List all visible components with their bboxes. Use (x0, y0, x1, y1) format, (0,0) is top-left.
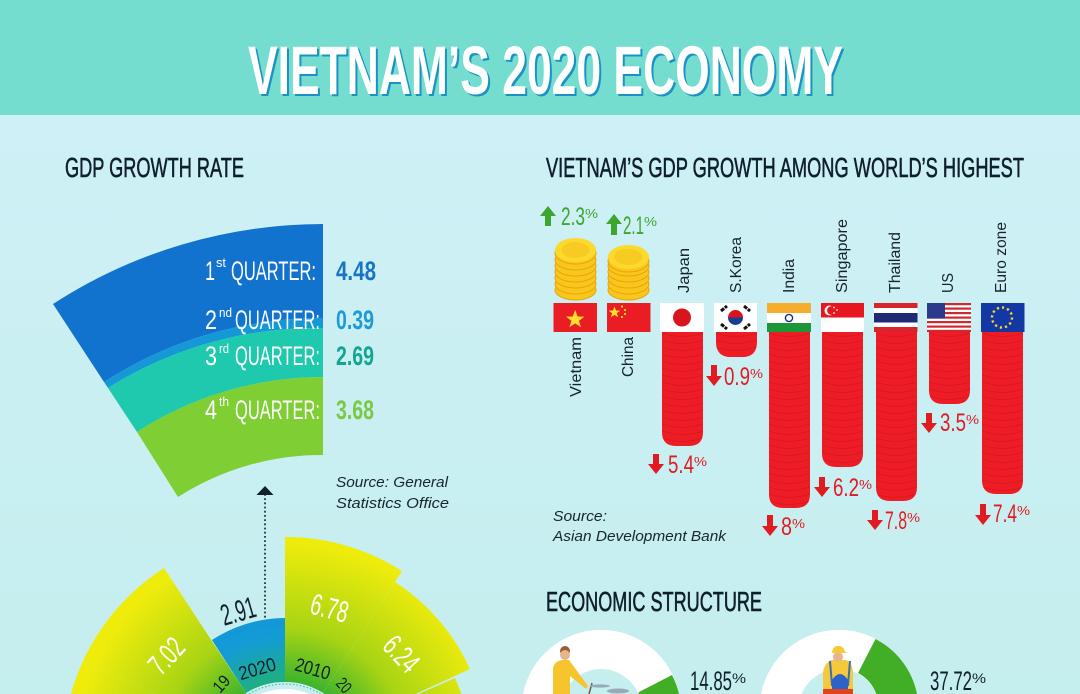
chart: yearly radial chart (71, 537, 470, 694)
decline: Thailand: 7.8 (885, 507, 907, 535)
value: 2019: 7.02 (142, 631, 192, 682)
label: 4th quarter: th (219, 394, 229, 409)
icon: farmer with fish (553, 646, 629, 694)
bar: Euro zone (982, 332, 1023, 494)
country labels: China (620, 337, 637, 377)
decline: US: % (966, 412, 979, 427)
flag: Vietnam (554, 303, 597, 332)
country labels: US (940, 273, 957, 293)
growth: China: % (644, 214, 657, 229)
decline: Singapore (814, 474, 872, 502)
label: 2nd quarter: 2 (205, 305, 217, 335)
decline: S.Korea: 0.9 (724, 363, 750, 391)
source: Asian Development Bank: Asian Development Bank (552, 528, 728, 545)
flag: Thailand (874, 303, 918, 332)
source: general statistics office (336, 474, 449, 512)
center ring (246, 682, 324, 694)
label: 3rd quarter: 3 (205, 341, 217, 371)
icon: construction worker (823, 646, 853, 694)
value: 3rd quarter: 2.69 (336, 341, 374, 371)
label: 3rd quarter: QUARTER: (235, 341, 320, 371)
decline: Euro zone: % (1017, 503, 1030, 518)
growth: China (606, 212, 657, 240)
value: 2nd quarter: 0.39 (336, 305, 374, 335)
flag: US (927, 303, 971, 332)
label: 2nd quarter (205, 305, 320, 335)
label: 2nd quarter: nd (219, 305, 232, 320)
country labels: Euro zone (993, 222, 1010, 293)
decline: Japan (648, 451, 707, 479)
decline: US (921, 409, 979, 437)
value: 2020: 2.91 (217, 591, 260, 633)
chart: quarterly fan chart (53, 224, 376, 497)
value: 2010: 6.78 (307, 588, 352, 630)
year: 2010: 2010 (292, 655, 333, 685)
country labels: S.Korea (728, 237, 745, 293)
bar: India (769, 332, 810, 508)
label: 1st quarter: 1 (205, 256, 215, 286)
growth: China: 2.1 (623, 212, 644, 240)
label: 1st quarter (205, 255, 316, 286)
decline: Euro zone (975, 500, 1030, 528)
wedge: 2020 (212, 618, 285, 693)
header band (0, 0, 1080, 115)
decline: Japan: % (694, 454, 707, 469)
label: 4th quarter: 4 (205, 395, 217, 425)
donut: agriculture (523, 630, 746, 694)
country labels (568, 219, 1010, 397)
value: 14.85%: % (732, 670, 746, 686)
country labels: Singapore (834, 219, 851, 293)
wedge: 2010 (285, 537, 402, 693)
country labels: Vietnam (568, 337, 585, 397)
label: 4th quarter: QUARTER: (235, 395, 320, 425)
coin stack: Vietnam (555, 238, 596, 300)
decline: Japan: 5.4 (668, 451, 694, 479)
donut: industry (761, 630, 986, 694)
heading: GDP growth rate: GDP GROWTH RATE (65, 152, 244, 183)
value: 1st quarter: 4.48 (336, 256, 376, 286)
label: 2nd quarter: QUARTER: (235, 305, 320, 335)
arrow: dotted link from 2020 to quarters (256, 486, 274, 638)
flag: India (767, 303, 811, 332)
decline: Thailand: % (907, 510, 920, 525)
country labels: Thailand (887, 232, 904, 293)
country labels: Japan (676, 248, 693, 293)
decline: India: 8 (781, 513, 792, 541)
wedge: 2018 (71, 661, 155, 694)
decline: India (762, 513, 805, 541)
decline: Singapore: 6.2 (833, 474, 859, 502)
year: 2020: 2020 (236, 654, 279, 685)
value: 37.72%: % (972, 670, 986, 686)
growth: Vietnam: % (585, 206, 598, 221)
value: 4th quarter: 3.68 (336, 395, 374, 425)
flag: China (607, 303, 650, 332)
decline: Euro zone: 7.4 (993, 500, 1017, 528)
growth: Vietnam: 2.3 (561, 203, 585, 231)
wedge: 2012 (418, 678, 461, 694)
coin stack: China (608, 245, 649, 300)
bar: US (929, 332, 970, 404)
bar: Thailand (876, 332, 917, 501)
country labels: India (781, 259, 798, 293)
source: general statistics office: Source: General (336, 474, 449, 491)
growth: Vietnam (540, 203, 598, 231)
bar: Singapore (822, 332, 863, 467)
flag: Euro zone (981, 303, 1024, 332)
bar: Japan (662, 332, 703, 446)
flag: S.Korea (714, 303, 757, 332)
wedge: 2019 (83, 568, 246, 694)
flag: Japan (660, 303, 704, 332)
heading: economic structure: ECONOMIC STRUCTURE (546, 586, 762, 617)
label: 3rd quarter: rd (219, 341, 229, 356)
label: 4th quarter (205, 394, 320, 425)
source: Asian Development Bank: Source: (553, 508, 607, 525)
value: 2011: 6.24 (376, 629, 426, 680)
decline: Thailand (867, 507, 920, 535)
chart: GDP growth by country (540, 203, 1030, 541)
label: 1st quarter: QUARTER: (231, 256, 316, 286)
decline: US: 3.5 (940, 409, 966, 437)
label: 3rd quarter (205, 341, 320, 371)
decline: S.Korea (706, 363, 763, 391)
label: 1st quarter: st (216, 255, 226, 270)
flag: Singapore (821, 303, 864, 332)
decline: India: % (792, 516, 805, 531)
decline: Singapore: % (859, 477, 872, 492)
wedge: 2011 (323, 582, 470, 694)
decline: S.Korea: % (750, 366, 763, 381)
source: general statistics office: Statistics Office (336, 495, 449, 512)
source: Asian Development Bank (552, 508, 728, 545)
bar: S.Korea (716, 332, 757, 357)
